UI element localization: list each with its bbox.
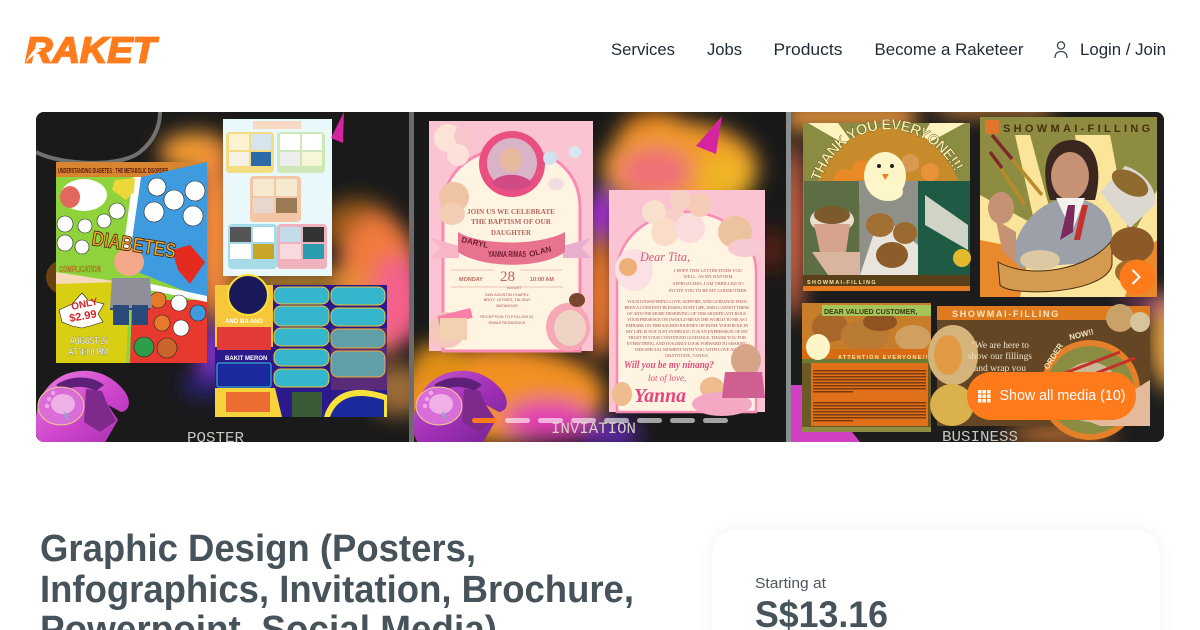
header bar bbox=[25, 30, 1166, 70]
starting label: Starting at bbox=[755, 575, 827, 592]
service title bbox=[40, 528, 634, 630]
invitation card: letter: EVERYTHING, AND I EAGERLY LOOK FORWARD TO SHARING bbox=[627, 341, 748, 347]
icon: pink telephone bbox=[34, 371, 129, 444]
navigation menu: Services bbox=[611, 40, 675, 59]
poster: order now: ORDER bbox=[1042, 342, 1065, 371]
invitation card: baptism: JOIN US WE CELEBRATE bbox=[467, 207, 555, 216]
poster: order now: NOW!! bbox=[1068, 327, 1095, 342]
poster: dear valued customer bbox=[802, 303, 931, 432]
invitation card: letter: GRATITUDE, YANNA. bbox=[665, 353, 709, 359]
show all media button: Show all media (10) bbox=[1000, 387, 1126, 404]
poster: showmai-filling portrait bbox=[980, 117, 1157, 297]
service title: Graphic Design (Posters, bbox=[40, 528, 476, 570]
party hat bbox=[696, 116, 722, 154]
poster: diabetes bbox=[56, 162, 207, 363]
invitation card: letter: OF ANYONE MORE DESERVING OF THIS SIGNIFICANT ROLE. bbox=[627, 311, 747, 316]
invitation card: letter: Yanna bbox=[634, 385, 686, 407]
poster: climate: BAKIT MERON bbox=[225, 356, 267, 362]
invitation card: letter: I HOPE THIS LETTER FINDS YOU bbox=[674, 268, 743, 273]
party hat bbox=[331, 112, 344, 143]
poster: diabetes: DIABETES bbox=[90, 227, 178, 263]
icon: grid bbox=[978, 390, 990, 402]
invitation card: baptism: BATANGAS bbox=[496, 303, 518, 308]
media carousel bbox=[36, 112, 1164, 442]
poster: showmai-filling portrait: SHOWMAI-FILLING bbox=[1003, 123, 1153, 135]
invitation card: baptism bbox=[429, 121, 593, 351]
poster: order now: show our fillings bbox=[968, 351, 1033, 361]
invitation card: letter: YOUR UNWAVERING LOVE, SUPPORT, AND GUIDANCE HAVE bbox=[627, 299, 747, 305]
invitation card: letter: Dear Tita, bbox=[639, 249, 690, 264]
poster: dear valued customer: DEAR VALUED CUSTOMER, bbox=[824, 309, 918, 316]
next arrow button bbox=[1120, 260, 1154, 294]
poster: diabetes: COMPLICATION bbox=[59, 265, 101, 274]
carousel pagination bbox=[472, 418, 728, 423]
invitation card: letter: YOUR PRESENCE ON I WOULD MEAN THE WORLD TO ME AS I bbox=[627, 317, 748, 322]
navigation menu: Become a Raketeer bbox=[874, 40, 1024, 59]
invitation card: baptism: 28 bbox=[500, 269, 515, 285]
caption: invitation: INVIATION bbox=[551, 420, 636, 438]
invitation card: letter: APPROACHES, I AM THRILLED TO bbox=[672, 281, 744, 287]
invitation card: letter: EMBARK ON THIS SACRED JOURNEY OF FAITH. YOUR ROLE IN bbox=[626, 323, 749, 328]
invitation card: baptism: THE BAPTISM OF OUR bbox=[471, 217, 552, 226]
invitation card: baptism: DAUGHTER bbox=[491, 228, 532, 237]
invitation card: baptism: BRGY. LEYNES, TALISAY bbox=[484, 297, 531, 302]
poster: thank you: SHOWMAI-FILLING bbox=[807, 280, 877, 286]
invitation card: baptism: SAN AGUSTIN CHAPEL bbox=[485, 292, 530, 297]
poster: order now: and wrap you bbox=[974, 363, 1027, 373]
gap photo strip bbox=[409, 112, 414, 442]
poster: thank you: THANK YOU EVERYONE!!! bbox=[810, 119, 964, 179]
invitation card: baptism: 10:00 AM bbox=[530, 277, 554, 283]
poster: climate: ANO BA ANG bbox=[225, 319, 264, 325]
poster: diabetes: AUGUST 26 bbox=[70, 336, 108, 347]
poster: diabetes: UNDERSTANDING DIABETES : THE METABOLIC DISORDER bbox=[58, 168, 168, 175]
poster: diabetes: $2.99 bbox=[68, 308, 98, 325]
poster: order now: SHOWMAI-FILLING bbox=[952, 309, 1060, 319]
logo: RAKET: RAKET bbox=[25, 30, 159, 70]
caption: poster: POSTER bbox=[187, 430, 244, 447]
navigation menu bbox=[611, 40, 1024, 59]
navigation menu: Products bbox=[774, 40, 842, 59]
icon: purple telephone bbox=[412, 371, 507, 444]
poster: thank you bbox=[803, 119, 971, 291]
invitation card: letter: MY LIFE IS NOT JUST SYMBOLIC IT IS AN EXPRESSION OF MY bbox=[626, 329, 749, 334]
pricing card bbox=[756, 577, 887, 630]
login link: Login / Join bbox=[1080, 40, 1166, 59]
slide: business bbox=[791, 112, 1164, 442]
ring decoration bbox=[36, 112, 160, 163]
invitation card: baptism: YANNA RIMAS bbox=[488, 250, 526, 259]
poster: diabetes: AT 4:00 PM bbox=[68, 347, 108, 358]
poster: one-word puzzle bbox=[223, 119, 332, 276]
invitation card: letter: INVITE YOU TO BE MY GODMOTHER. bbox=[669, 288, 747, 293]
invitation card: baptism: RIMAS RESIDENCE bbox=[488, 320, 526, 325]
poster: order now: "We are here to bbox=[971, 340, 1030, 350]
invitation card: baptism: AUGUST bbox=[507, 286, 522, 290]
service title: Infographics, Invitation, Brochure, bbox=[40, 569, 634, 611]
slide: invitation bbox=[395, 110, 786, 446]
invitation card: letter bbox=[609, 190, 765, 416]
invitation card: baptism: OLAN bbox=[528, 244, 553, 259]
invitation card: letter: lot of love, bbox=[648, 373, 686, 383]
previous arrow ghost bbox=[46, 262, 56, 292]
invitation card: baptism: RECEPTION TO FOLLOW AT bbox=[480, 314, 534, 319]
poster: order now bbox=[928, 304, 1150, 440]
invitation card: letter: BEEN A CONSTANT BLESSING IN MY LIFE, AND I CANNOT THINK bbox=[624, 305, 750, 311]
invitation card: letter: TRUST IN YOUR CONTINUED GUIDANCE. THANK YOU FOR bbox=[628, 335, 746, 340]
poster: dear valued customer: ATTENTION EVERYONE!! bbox=[838, 355, 929, 361]
invitation card: letter: WELL. AS MY BAPTISM bbox=[683, 274, 733, 279]
invitation card: baptism: DARYL bbox=[461, 235, 489, 250]
invitation card: baptism: MONDAY bbox=[459, 277, 483, 283]
show all media button bbox=[967, 372, 1136, 420]
invitation card: letter: THIS SPECIAL MOMENT WITH YOU. WITH LOVE AND bbox=[634, 347, 740, 352]
icon: user bbox=[1055, 42, 1067, 58]
poster: climate bbox=[215, 275, 387, 417]
navigation menu: Jobs bbox=[707, 40, 742, 59]
poster: diabetes: ONLY bbox=[70, 297, 99, 313]
slide: poster bbox=[34, 112, 428, 447]
invitation card: letter: Will you be my ninang? bbox=[624, 360, 714, 371]
caption: business: BUSINESS bbox=[942, 429, 1018, 446]
